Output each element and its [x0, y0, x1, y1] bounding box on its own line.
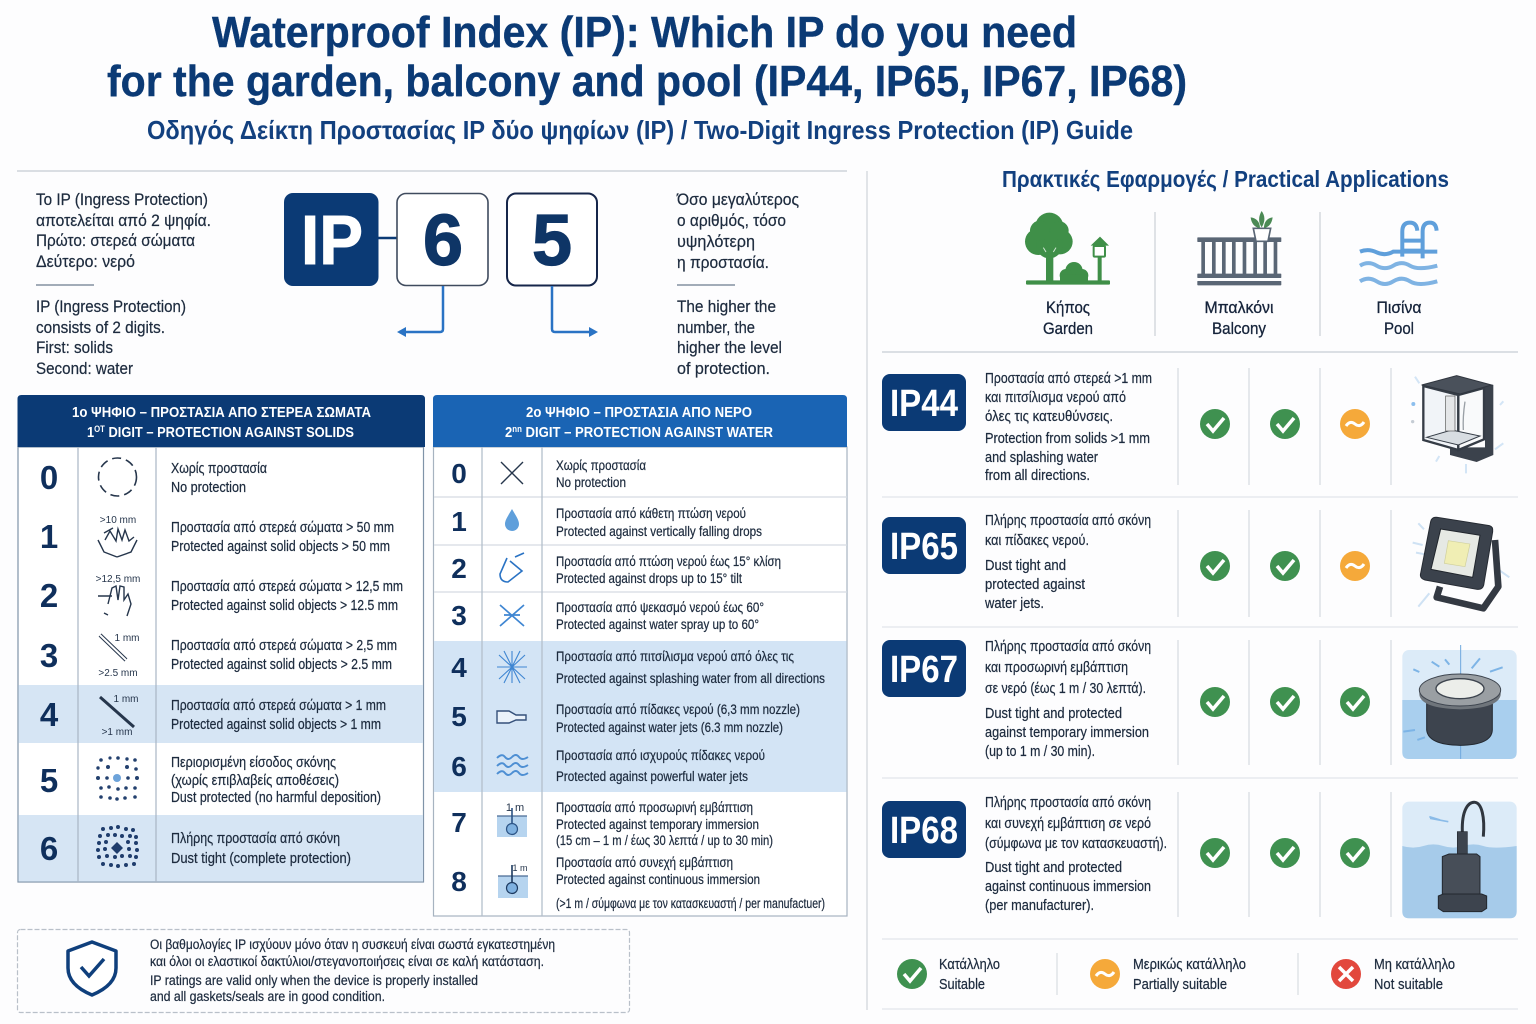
- text block: IP explanation: Το IP (Ingress Protection): [36, 191, 208, 209]
- row: IP67: against temporary immersion: [985, 725, 1149, 741]
- legend: suitable: [897, 957, 1000, 993]
- icon: powerful waves: [497, 755, 528, 775]
- labels: applications: Μπαλκόνι: [1204, 299, 1274, 317]
- digit rows: Προστασία από ισχυρούς πίδακες νερού: [556, 748, 765, 763]
- badge: IP44: IP44: [890, 383, 958, 425]
- icon: dust protected: [96, 756, 139, 801]
- table header: DIGIT – PROTECTION AGAINST SOLIDS: [105, 424, 354, 441]
- digit rows: Dust tight (complete protection): [171, 851, 351, 867]
- row: IP67: Πλήρης προστασία από σκόνη: [985, 639, 1151, 655]
- digit rows: Protected against solid objects > 12.5 mm: [171, 598, 398, 614]
- digit rows: No protection: [556, 475, 626, 490]
- badge: IP65: IP65: [890, 526, 958, 568]
- row: IP44: and splashing water: [985, 450, 1098, 466]
- row: IP65: water jets.: [984, 596, 1044, 612]
- image: wall lantern: [1411, 376, 1503, 473]
- icon: temporary immersion: 1 m: [506, 802, 524, 814]
- digit rows: Protected against solid objects > 50 mm: [171, 539, 390, 555]
- badge: IP67: [882, 640, 966, 697]
- row: IP65: Πλήρης προστασία από σκόνη: [985, 513, 1151, 529]
- row: IP68: Dust tight and protected: [985, 860, 1122, 876]
- digit rows: Προστασία από στερεά σώματα > 12,5 mm: [171, 579, 403, 595]
- subtitle: Οδηγός Δείκτη Προστασίας IP δύο ψηφίων (IP) / Two-Digit Ingress Protection (IP) Guide: [147, 115, 1133, 145]
- text block: IP explanation: [36, 191, 211, 378]
- digit rows: Protected against solid objects > 2.5 mm: [171, 657, 392, 673]
- table header: OT: [94, 424, 105, 434]
- heading: practical applications: Πρακτικές Εφαρμογές / Practical Applications: [1002, 166, 1449, 192]
- digit rows: 6: [451, 751, 467, 782]
- row: IP65: protected against: [985, 577, 1085, 593]
- text block: higher number: ο αριθμός, τόσο: [677, 212, 786, 230]
- digit rows: (χωρίς επιβλαβείς αποθέσεις): [171, 773, 339, 789]
- title: for the garden, balcony and pool (IP44, IP65, IP67, IP68): [107, 57, 1187, 106]
- digit rows: [451, 458, 825, 911]
- icon: garden: [1025, 213, 1110, 285]
- callout: installation note: IP ratings are valid only when the device is properly installed: [150, 973, 478, 988]
- row: IP68: [882, 795, 1517, 918]
- legend: partially suitable: [1090, 957, 1246, 993]
- callout: installation note: and all gaskets/seals are in good condition.: [150, 989, 385, 1004]
- table header: 1ο ΨΗΦΙΟ – ΠΡΟΣΤΑΣΙΑ ΑΠΟ ΣΤΕΡΕΑ ΣΩΜΑΤΑ: [72, 404, 371, 421]
- icon: wire 1 mm: 1 mm: [114, 694, 138, 705]
- digit rows: (15 cm – 1 m / έως 30 λεπτά / up to 30 min): [556, 833, 773, 848]
- text block: higher number: [676, 191, 799, 378]
- table header: 2ο ΨΗΦΙΟ – ΠΡΟΣΤΑΣΙΑ ΑΠΟ ΝΕΡΟ: [526, 404, 752, 421]
- digit rows: Protected against powerful water jets: [556, 769, 748, 784]
- digit rows: 0: [451, 458, 467, 489]
- digit rows: Προστασία από κάθετη πτώση νερού: [556, 506, 746, 521]
- digit rows: Προστασία από στερεά σώματα > 2,5 mm: [171, 638, 397, 654]
- table header: [18, 395, 425, 447]
- icon: hand 50 mm: [98, 515, 137, 557]
- digit rows: Dust protected (no harmful deposition): [171, 790, 381, 806]
- badge: IP68: [882, 801, 966, 858]
- legend: not suitable: Μη κατάλληλο: [1374, 957, 1455, 973]
- icon: tool 2.5 mm: [98, 633, 140, 679]
- legend: partially suitable: Partially suitable: [1133, 977, 1227, 993]
- row: IP68: against continuous immersion: [985, 879, 1151, 895]
- icon: continuous immersion: 1 m: [512, 863, 528, 873]
- suitability marks: [1200, 687, 1370, 717]
- labels: applications: Balcony: [1212, 320, 1267, 338]
- digit rows: Protected against drops up to 15° tilt: [556, 571, 742, 586]
- digit rows: 4: [40, 696, 59, 733]
- text block: higher number: υψηλότερη: [677, 233, 755, 251]
- table header: 2: [505, 424, 513, 441]
- row: IP67: (up to 1 m / 30 min).: [985, 744, 1095, 760]
- panel: second digit water table: [433, 395, 847, 916]
- labels: applications: Garden: [1043, 320, 1093, 338]
- panel: first digit solids table: [18, 395, 425, 882]
- icon: shield: [68, 942, 116, 995]
- row: IP44: Protection from solids >1 mm: [985, 431, 1150, 447]
- row: IP44: Προστασία από στερεά >1 mm: [985, 371, 1152, 387]
- icon: splashing: [497, 651, 527, 683]
- row: IP67: Dust tight and protected: [985, 706, 1122, 722]
- suitability marks: [1200, 409, 1370, 439]
- digit rows: No protection: [171, 480, 246, 496]
- digit rows: 5: [451, 701, 467, 732]
- text block: higher number: η προστασία.: [677, 254, 769, 272]
- icon: temporary immersion: [497, 802, 527, 837]
- badge: IP68: IP68: [890, 810, 958, 852]
- icon: hand 50 mm: >10 mm: [100, 515, 136, 526]
- image: in-ground light: [1402, 645, 1517, 759]
- digit rows: Προστασία από πτώση νερού έως 15° κλίση: [556, 554, 781, 569]
- digit rows: Προστασία από προσωρινή εμβάπτιση: [556, 800, 753, 815]
- callout: installation note: [18, 930, 630, 1012]
- IP65 diagram: 5: [532, 201, 572, 281]
- IP65 diagram: [284, 193, 598, 337]
- table header: nn: [512, 424, 522, 434]
- digit rows: 0: [40, 459, 58, 496]
- IP65 diagram: 6: [423, 201, 463, 281]
- digit rows: 2: [451, 553, 467, 584]
- IP65 diagram: IP: [301, 201, 363, 279]
- digit rows: Protected against water jets (6.3 mm nozzle): [556, 720, 783, 735]
- icon: water spray: [500, 605, 524, 626]
- icon: dashed circle: [98, 458, 136, 496]
- row: IP68: (σύμφωνα με τον κατασκευαστή).: [985, 836, 1167, 852]
- text block: IP explanation: Δεύτερο: νερό: [36, 253, 135, 271]
- digit rows: 2: [40, 577, 58, 614]
- text block: IP explanation: IP (Ingress Protection): [36, 298, 186, 316]
- digit rows: 3: [40, 637, 58, 674]
- badge: IP44: [882, 374, 966, 431]
- row: IP65: Dust tight and: [985, 558, 1066, 574]
- labels: applications: Πισίνα: [1376, 299, 1422, 317]
- digit rows: Προστασία από πίδακες νερού (6,3 mm nozzle): [556, 702, 800, 717]
- callout: installation note: και όλοι οι ελαστικοί δακτύλιοι/στεγανοποιήσεις είναι σε καλή κατάσταση.: [150, 954, 544, 969]
- row: IP67: σε νερό (έως 1 m / 30 λεπτά).: [985, 681, 1146, 697]
- digit rows: Protected against splashing water from all directions: [556, 671, 825, 686]
- icon: finger 12.5 mm: >12,5 mm: [96, 574, 140, 585]
- row: IP67: [882, 639, 1517, 760]
- table header: DIGIT – PROTECTION AGAINST WATER: [522, 424, 773, 441]
- row: IP44: και πιτσίλισμα νερού από: [985, 390, 1126, 406]
- labels: applications: [1043, 299, 1422, 338]
- text block: higher number: number, the: [677, 319, 755, 337]
- text block: higher number: of protection.: [677, 360, 770, 378]
- digit rows: (>1 m / σύμφωνα με τον κατασκευαστή / per manufactuer): [556, 896, 825, 911]
- text block: IP explanation: Πρώτο: στερεά σώματα: [36, 232, 195, 250]
- suitability marks: [1200, 551, 1370, 581]
- row: IP65: και πίδακες νερού.: [985, 533, 1089, 549]
- legend: partially suitable: Μερικώς κατάλληλο: [1133, 957, 1246, 973]
- digit rows: 1: [451, 506, 467, 537]
- badge: IP65: [882, 517, 966, 574]
- icon: water drop: [505, 509, 519, 531]
- digit rows: 6: [40, 830, 58, 867]
- table header: [433, 395, 847, 447]
- row: IP65: [882, 513, 1509, 612]
- text block: IP explanation: Second: water: [36, 360, 133, 378]
- text block: IP explanation: consists of 2 digits.: [36, 319, 165, 337]
- legend: not suitable: [1331, 957, 1455, 993]
- digit rows: Προστασία από στερεά σώματα > 50 mm: [171, 520, 394, 536]
- digit rows: Προστασία από στερεά σώματα > 1 mm: [171, 698, 386, 714]
- row: IP67: και προσωρινή εμβάπτιση: [985, 660, 1128, 676]
- digit rows: Προστασία από συνεχή εμβάπτιση: [556, 855, 733, 870]
- callout: installation note: Οι βαθμολογίες IP ισχύουν μόνο όταν η συσκευή είναι σωστά εγκατεστημένη: [150, 937, 555, 952]
- icon: continuous immersion: [498, 863, 528, 898]
- digit rows: 4: [451, 652, 467, 683]
- legend: suitable: Κατάλληλο: [939, 957, 1000, 973]
- icon: tool 2.5 mm: >2.5 mm: [98, 668, 138, 679]
- row: IP44: όλες τις κατευθύνσεις.: [985, 409, 1113, 425]
- text block: IP explanation: First: solids: [36, 339, 113, 357]
- icon: finger 12.5 mm: [96, 574, 140, 616]
- image: floodlight: [1413, 517, 1509, 608]
- text block: higher number: Όσο μεγαλύτερος: [676, 191, 799, 209]
- icon: tool 2.5 mm: 1 mm: [114, 633, 140, 644]
- icon: water jet nozzle: [497, 711, 526, 723]
- icon: wire 1 mm: [100, 694, 138, 738]
- digit rows: Protected against temporary immersion: [556, 817, 759, 832]
- text block: higher number: The higher the: [677, 298, 776, 316]
- legend: not suitable: Not suitable: [1374, 977, 1443, 993]
- digit rows: Protected against solid objects > 1 mm: [171, 717, 381, 733]
- row: IP44: from all directions.: [985, 468, 1090, 484]
- digit rows: 3: [451, 600, 467, 631]
- digit rows: Protected against continuous immersion: [556, 872, 760, 887]
- labels: applications: Κήπος: [1046, 299, 1090, 317]
- icon: 15 degree tilt: [500, 553, 524, 582]
- title: [107, 8, 1187, 106]
- digit rows: [40, 459, 403, 867]
- digit rows: Χωρίς προστασία: [556, 458, 646, 473]
- digit rows: Περιορισμένη είσοδος σκόνης: [171, 755, 336, 771]
- text block: higher number: higher the level: [677, 339, 782, 357]
- image: submersible pump: [1402, 802, 1517, 918]
- icon: wire 1 mm: >1 mm: [102, 727, 132, 738]
- digit rows: Προστασία από πιτσίλισμα νερού από όλες τις: [556, 649, 794, 664]
- labels: applications: Pool: [1384, 320, 1414, 338]
- digit rows: 8: [451, 866, 467, 897]
- row: IP68: (per manufacturer).: [985, 898, 1094, 914]
- icon: dust tight: [96, 825, 139, 868]
- digit rows: Protected against vertically falling drops: [556, 524, 762, 539]
- suitability marks: [1200, 838, 1370, 868]
- icon: pool: [1360, 223, 1437, 284]
- badge: IP67: IP67: [890, 649, 958, 691]
- icon: no protection cross: [501, 462, 523, 484]
- text block: IP explanation: αποτελείται από 2 ψηφία.: [36, 212, 211, 230]
- title: Waterproof Index (IP): Which IP do you need: [212, 8, 1077, 57]
- digit rows: 1: [40, 518, 58, 555]
- digit rows: 7: [451, 807, 467, 838]
- digit rows: Protected against water spray up to 60°: [556, 617, 759, 632]
- digit rows: Πλήρης προστασία από σκόνη: [171, 831, 340, 847]
- digit rows: Προστασία από ψεκασμό νερού έως 60°: [556, 600, 764, 615]
- digit rows: 5: [40, 762, 58, 799]
- legend: suitable: Suitable: [939, 977, 985, 993]
- table header: 1: [87, 424, 95, 441]
- legend: [897, 953, 1455, 995]
- row: IP68: Πλήρης προστασία από σκόνη: [985, 795, 1151, 811]
- row: IP68: και συνεχή εμβάπτιση σε νερό: [985, 816, 1151, 832]
- row: IP44: [882, 371, 1503, 484]
- icon: balcony: [1197, 211, 1281, 285]
- digit rows: Χωρίς προστασία: [171, 461, 267, 477]
